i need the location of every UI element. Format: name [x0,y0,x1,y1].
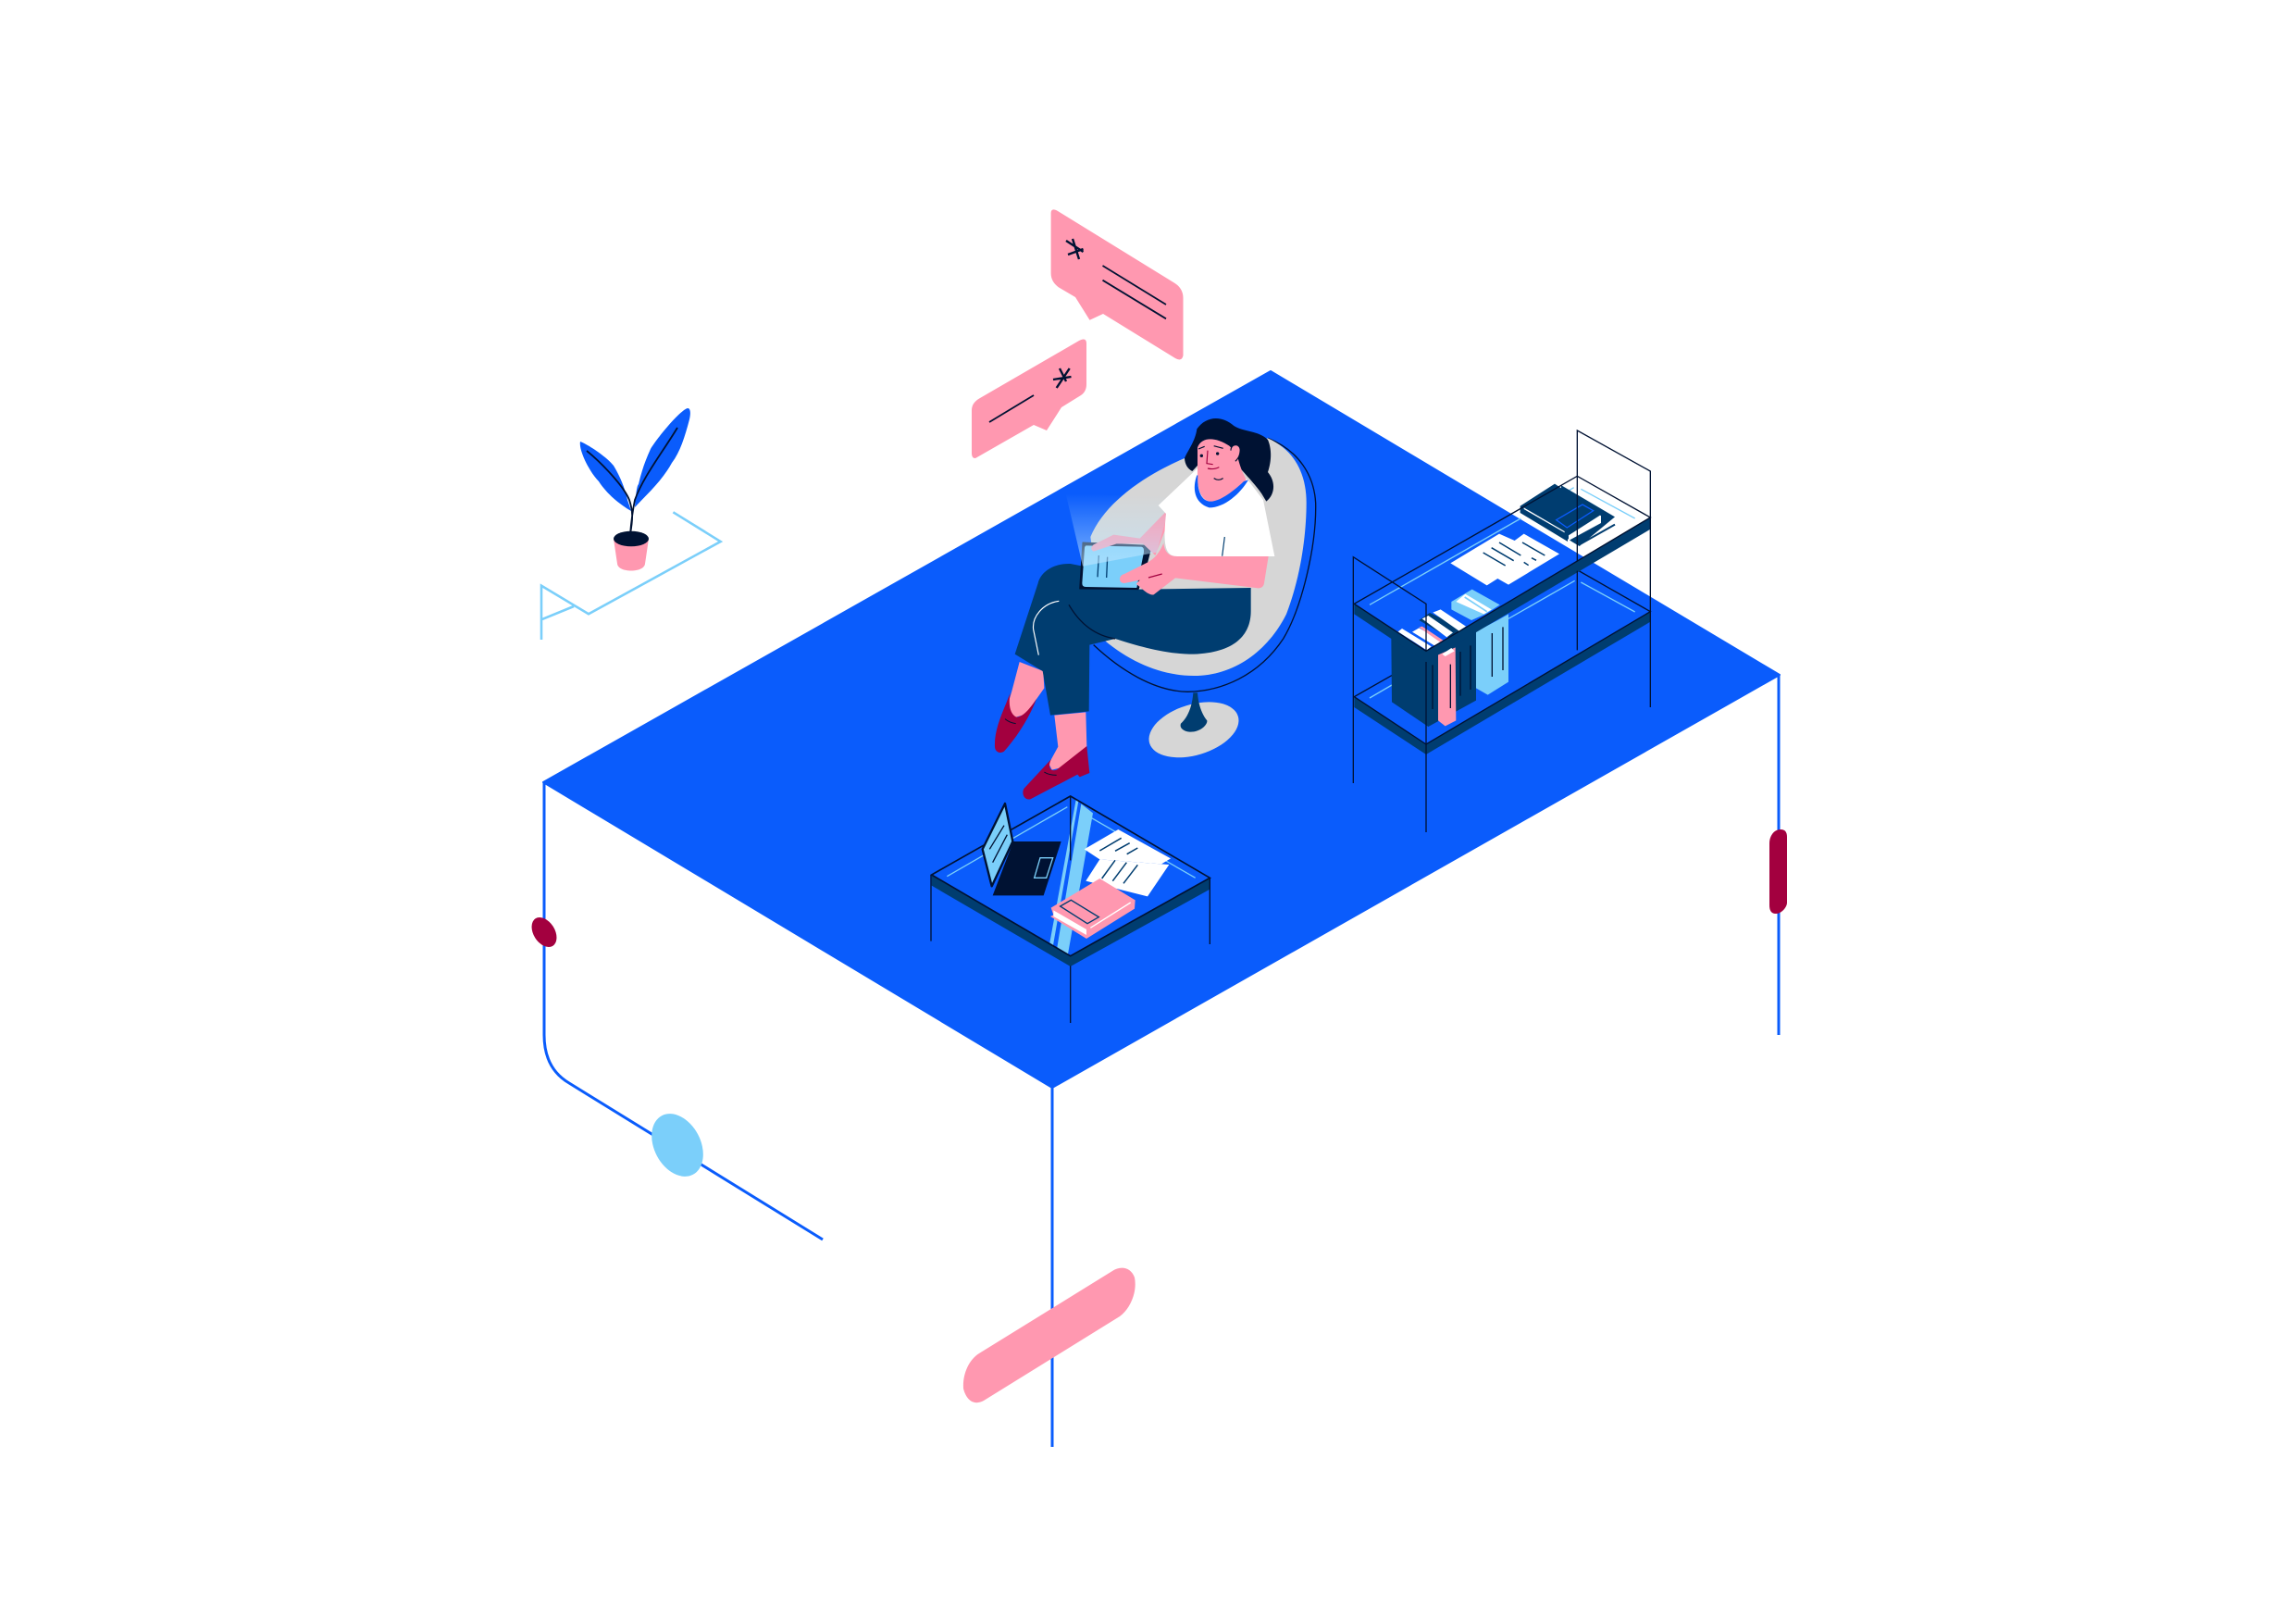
left shoe [995,692,1036,753]
upper shelf highlights [1370,488,1635,604]
lower shelf outline [1354,570,1650,744]
ear [1231,445,1240,461]
chair stem [1181,692,1207,732]
right shoe crease [1044,772,1057,775]
screen lines [989,826,1007,863]
upper shelf outline [1354,476,1650,651]
upper stacked book [1520,484,1601,542]
bubble text line [989,395,1034,422]
pink book top [1442,648,1455,656]
book cover [1050,879,1136,939]
collar [1195,475,1248,507]
book title outline [1557,505,1594,528]
finger line [1148,574,1162,578]
icon: pot soil [614,531,649,546]
laptop base [993,841,1061,895]
paper text lines [1099,838,1137,883]
potted plant [580,408,690,570]
bubble text lines [1103,266,1166,318]
speech bubble small [972,340,1086,458]
lower stacked book [1561,485,1615,546]
speech bubble large [1051,209,1183,359]
knee fold line [1069,604,1115,639]
trousers [1015,564,1251,716]
tablet screen [1082,545,1144,588]
left leg skin [1007,662,1044,717]
shelf document [1450,534,1559,585]
hair [1185,418,1273,502]
left corner line with curve [544,782,823,1240]
book page tops [1398,594,1492,650]
left shoe crease [1005,719,1016,724]
chair base [1142,692,1246,767]
front arm and hand [1120,543,1269,594]
light blue marker on left line [641,1104,714,1186]
book label [1061,900,1098,924]
laptop screen [983,804,1012,886]
book spine line [1581,525,1615,543]
tablet back [1080,542,1150,590]
bubble asterisk [1053,368,1072,388]
chair outer outline [1094,438,1316,692]
right leg skin [1049,712,1086,770]
crimson capsule on right line [1769,829,1787,914]
lower shelf highlights [1370,580,1635,698]
bubble body [972,340,1086,458]
shirt seam [1222,537,1224,556]
wide light stripe [1057,804,1093,954]
icon: left leaf [580,442,631,511]
pink book [1438,647,1456,726]
document text lines [1483,542,1545,566]
chair seat [1090,438,1307,676]
right corner line [1777,675,1781,1035]
book spine lines [1433,627,1503,709]
papers [1085,829,1171,896]
upper book page strip [1524,507,1565,532]
centre corner line [1051,1088,1053,1447]
navy books [1391,629,1476,727]
icon: stems and veins [587,428,677,534]
upper sheet [1085,829,1171,864]
shelf posts and side panels [1353,430,1650,832]
floating rug outline [541,512,721,640]
tablet lines [1098,555,1108,578]
white pages [1569,516,1600,541]
right shoe [1023,746,1089,800]
light blue book top [1451,590,1500,620]
icon: right leaf [635,408,690,507]
lower shelf thickness [1354,612,1650,754]
lower book pages [1569,516,1601,541]
icon: pink pot [614,539,649,570]
upper shelf thickness [1354,517,1650,662]
laptop trackpad [1035,858,1053,878]
glass coffee table [931,796,1210,1023]
face details [1198,446,1223,480]
t-shirt [1159,465,1274,556]
woman in egg chair [995,418,1316,800]
book highlight [1090,903,1131,928]
table legs [931,796,1210,1023]
bookshelf [1353,430,1650,832]
floor platform [543,371,1780,1088]
lower sheet [1086,859,1169,896]
bubble body [1051,209,1183,359]
light blue book [1476,614,1508,695]
rear arm and hand [1091,512,1166,555]
tablet glow [1066,493,1173,567]
glass reflections [947,807,1196,878]
pink capsule on centre line [963,1268,1136,1402]
bubble asterisk [1066,239,1083,259]
table thickness [932,875,1210,966]
book pages [1053,910,1086,935]
narrow light stripe [1049,800,1078,945]
table outline [932,796,1210,956]
laptop [983,804,1061,895]
crimson marker on left line [527,913,562,952]
knee highlight [1034,601,1059,655]
pink book [1050,879,1136,939]
neck and face [1198,439,1247,502]
